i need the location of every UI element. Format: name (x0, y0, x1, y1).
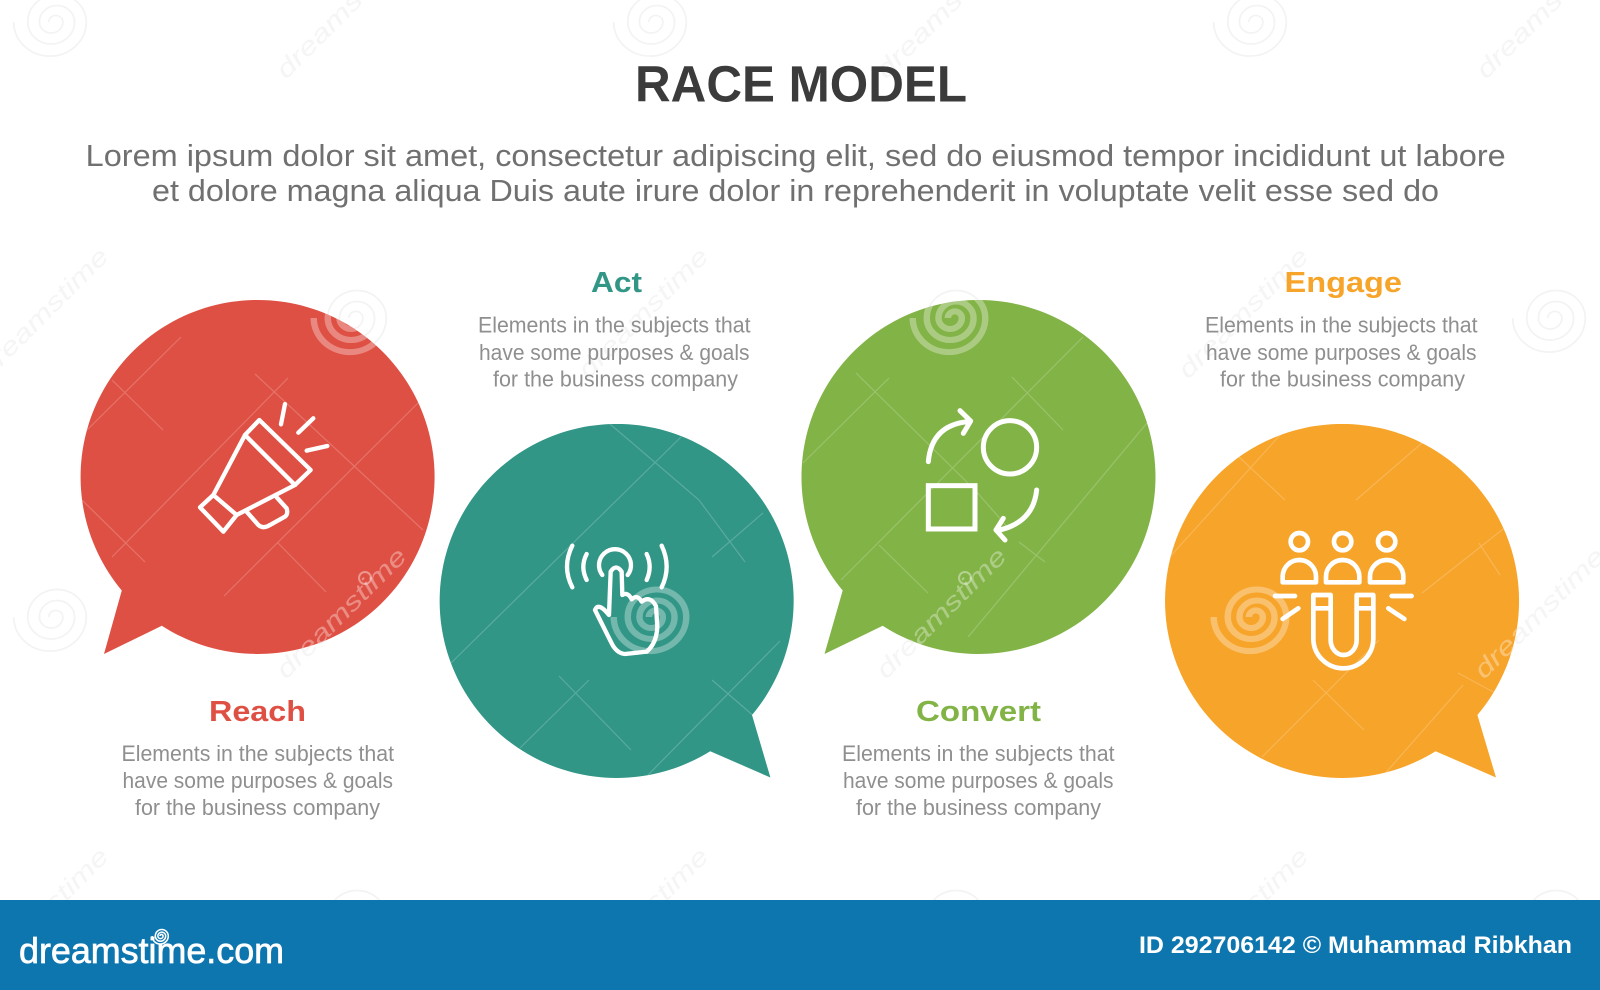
speech bubble: engage (1165, 424, 1519, 778)
footer band (0, 900, 1600, 990)
title: RACE MODEL (635, 56, 967, 112)
panel: act (440, 267, 794, 778)
icon: megaphone (200, 404, 327, 532)
description: act: for the business company (493, 366, 738, 392)
heading: act: Act (591, 267, 642, 299)
description: act (478, 312, 750, 392)
description: reach: have some purposes & goals (122, 768, 393, 793)
heading: convert: Convert (916, 696, 1041, 728)
speech bubble: reach (81, 300, 435, 654)
description: engage: have some purposes & goals (1206, 340, 1476, 365)
image credit: ID 292706142 © Muhammad Ribkhan (1139, 932, 1572, 959)
icon: shapes with cycle arrows (928, 411, 1037, 540)
description: convert: Elements in the subjects that (842, 741, 1114, 766)
panel: engage (1165, 272, 1520, 778)
description: reach: Elements in the subjects that (122, 741, 394, 766)
panel: reach: dreamstime (270, 542, 413, 684)
description: reach: for the business company (135, 795, 380, 820)
subtitle text block: Lorem ipsum dolor sit amet, consectetur adipiscing elit, sed do eiusmod tempor incididunt ut labore (86, 138, 1506, 173)
panel: engage: dreamstime (1468, 542, 1600, 684)
speech bubble: act (440, 424, 794, 778)
description: convert (842, 741, 1114, 820)
watermark background: dreamstime (572, 242, 715, 384)
panel: convert: dreamstime (870, 542, 1013, 684)
watermark background: dreamstime (270, 542, 413, 684)
description: engage (1205, 312, 1478, 392)
speech bubble: convert (801, 300, 1155, 654)
watermark background: dreamstime (1468, 542, 1600, 684)
watermark background: dreamstime (870, 542, 1013, 684)
heading: engage: Engage (1284, 267, 1402, 299)
subtitle text block: et dolore magna aliqua Duis aute irure dolor in reprehenderit in voluptate velit esse sed do (152, 173, 1439, 208)
description: engage: Elements in the subjects that (1205, 312, 1478, 338)
subtitle text block (86, 138, 1506, 208)
watermark background: dreamstime (1172, 242, 1315, 384)
description: engage: for the business company (1220, 366, 1465, 392)
watermark background: dreamstime (1172, 842, 1315, 984)
footer logo: dreamstime.com (19, 930, 284, 971)
watermark background: dreamstime (572, 842, 715, 984)
panel: reach (81, 290, 435, 820)
panel: convert (801, 290, 1155, 820)
description: convert: have some purposes & goals (843, 768, 1114, 793)
description: act: Elements in the subjects that (478, 312, 750, 338)
heading: reach: Reach (209, 696, 306, 728)
icon: people and magnet (1275, 533, 1412, 668)
description: act: have some purposes & goals (479, 340, 750, 365)
icon: tapping hand (567, 546, 667, 654)
description: convert: for the business company (856, 795, 1101, 820)
description: reach (122, 741, 394, 820)
